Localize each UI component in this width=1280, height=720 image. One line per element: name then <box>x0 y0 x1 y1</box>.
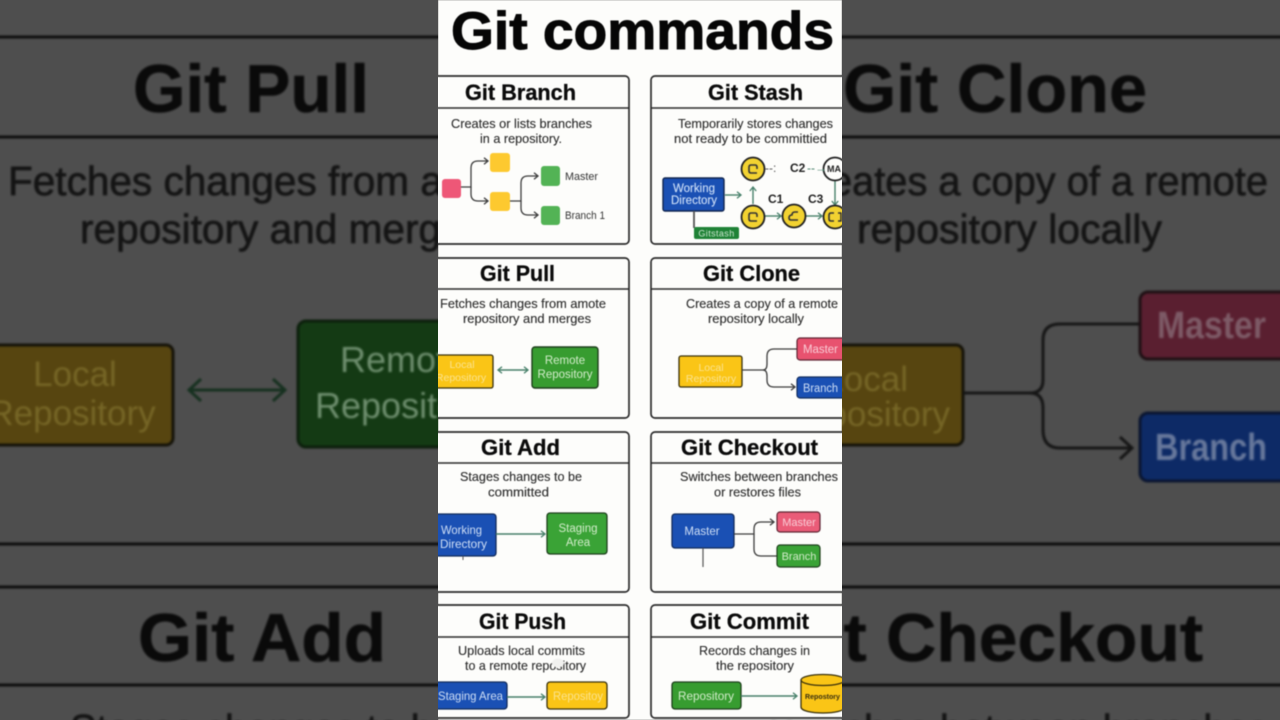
panel: Git Add <box>420 432 629 592</box>
clone diagram: Local <box>698 362 724 374</box>
description: Git Clone: Creates a copy of a remote <box>686 296 838 311</box>
panel: Git Commit <box>651 605 861 718</box>
stash diagram: --→ <box>807 161 827 175</box>
central infographic column <box>420 0 861 720</box>
stash diagram: Working <box>673 183 715 195</box>
description: Git Checkout: Switches between branches <box>680 469 838 484</box>
add diagram: Staging <box>558 523 598 535</box>
blurred left background panel: Git Pull / Git Add: repository and merges <box>80 206 484 252</box>
push diagram: Staging Area <box>438 689 503 703</box>
stash diagram <box>663 158 846 239</box>
panel: Git Branch <box>420 76 629 244</box>
description: Git Branch: Creates or lists branches <box>451 116 592 131</box>
add diagram: Directory <box>440 537 487 551</box>
description: Git Add: committed <box>488 484 549 500</box>
blurred right background panel: Git Clone / Git Checkout: Local <box>824 360 908 399</box>
blurred left background panel: Git Pull / Git Add: Git Add <box>138 600 386 676</box>
heading: Git Stash: Git Stash <box>708 80 803 105</box>
checkout diagram <box>672 512 820 567</box>
blurred right background panel: Git Clone / Git Checkout: Git Clone <box>843 51 1147 127</box>
add diagram <box>425 513 607 560</box>
description: Git Checkout: or restores files <box>714 484 801 500</box>
blurred right background panel: Git Clone / Git Checkout: Creates a copy of a remote <box>788 158 1268 204</box>
description: Git Commit: the repository <box>716 658 794 673</box>
pull diagram: Remote <box>545 355 585 367</box>
blurred left background panel: Git Pull / Git Add: Fetches changes from amote <box>8 158 533 204</box>
heading: Git Pull: Git Pull <box>480 261 555 286</box>
blurred left background panel: Git Pull / Git Add: Local <box>33 355 117 394</box>
blurred right background panel: Git Clone / Git Checkout <box>760 0 1280 720</box>
description: Git Stash: Temporarily stores changes <box>678 116 833 131</box>
heading: Git Push: Git Push <box>479 609 566 634</box>
blurred right background panel: Git Clone / Git Checkout: repository locally <box>857 206 1162 252</box>
commit diagram: Repostory <box>805 692 841 701</box>
stash diagram: --: <box>765 161 776 175</box>
panel: Git Push <box>420 605 629 718</box>
clone diagram <box>679 338 852 398</box>
panel: Git Stash <box>651 76 861 244</box>
stash diagram: C1 <box>768 192 784 206</box>
blurred left background panel: Git Pull / Git Add <box>0 0 533 720</box>
stash diagram: Gitstash <box>698 228 735 238</box>
push diagram: Repositoy <box>553 691 603 703</box>
branch diagram <box>442 153 605 225</box>
heading: Git Add: Git Add <box>481 435 560 460</box>
description: Git Branch: in a repository. <box>480 131 562 146</box>
pull diagram: Repository <box>538 369 593 381</box>
heading: Git Branch: Git Branch <box>465 80 576 105</box>
branch diagram: Branch 1 <box>565 210 605 222</box>
blurred right background panel: Git Clone / Git Checkout: Git Checkout <box>770 600 1203 676</box>
stash diagram: MA <box>827 164 841 174</box>
pull diagram: Local <box>449 359 475 371</box>
add diagram: Area <box>566 537 591 549</box>
description: Git Push: Uploads local commits <box>458 643 585 658</box>
description: Git Push: to a remote repository <box>465 658 586 673</box>
description: Git Commit: Records changes in <box>699 643 810 658</box>
blurred left background panel: Git Pull / Git Add: Git Pull <box>133 51 369 127</box>
clone diagram: Branch <box>803 383 838 395</box>
branch diagram: Master <box>565 171 598 183</box>
add diagram: Working <box>441 523 482 537</box>
commit diagram: Repository <box>678 689 734 703</box>
clone diagram: Master <box>803 344 838 356</box>
push diagram <box>425 682 607 709</box>
stash diagram: Directory <box>671 195 717 207</box>
heading: Git Checkout: Git Checkout <box>681 435 819 460</box>
description: Git Pull: Fetches changes from amote <box>440 296 606 311</box>
commit diagram <box>672 674 845 713</box>
panel: Git Pull <box>420 258 629 418</box>
blurred right background panel: Git Clone / Git Checkout: Repository <box>783 395 950 434</box>
panel: Git Clone <box>651 258 861 418</box>
description: Git Pull: repository and merges <box>463 311 591 326</box>
heading: Git Commit: Git Commit <box>690 609 810 634</box>
checkout diagram: Master <box>684 526 720 538</box>
blurred left background panel: Git Pull / Git Add: Repository <box>315 385 487 426</box>
stash diagram: C3 <box>808 192 824 206</box>
blurred left background panel: Git Pull / Git Add: Remote <box>340 339 466 380</box>
panel: Git Checkout <box>651 432 861 592</box>
pull diagram <box>425 347 598 388</box>
title: Git commands <box>451 2 834 61</box>
checkout diagram: Branch <box>782 551 816 563</box>
pull diagram: Repository <box>436 372 487 384</box>
description: Git Add: Stages changes to be <box>460 469 582 484</box>
heading: Git Clone: Git Clone <box>703 261 800 286</box>
checkout diagram: Master <box>782 517 816 529</box>
description: Git Stash: not ready to be committied <box>674 131 827 146</box>
blurred right background panel: Git Clone / Git Checkout: Master <box>1157 305 1266 347</box>
clone diagram: Repository <box>686 373 737 385</box>
stash diagram: C2 <box>790 161 806 175</box>
description: Git Clone: repository locally <box>708 311 804 326</box>
